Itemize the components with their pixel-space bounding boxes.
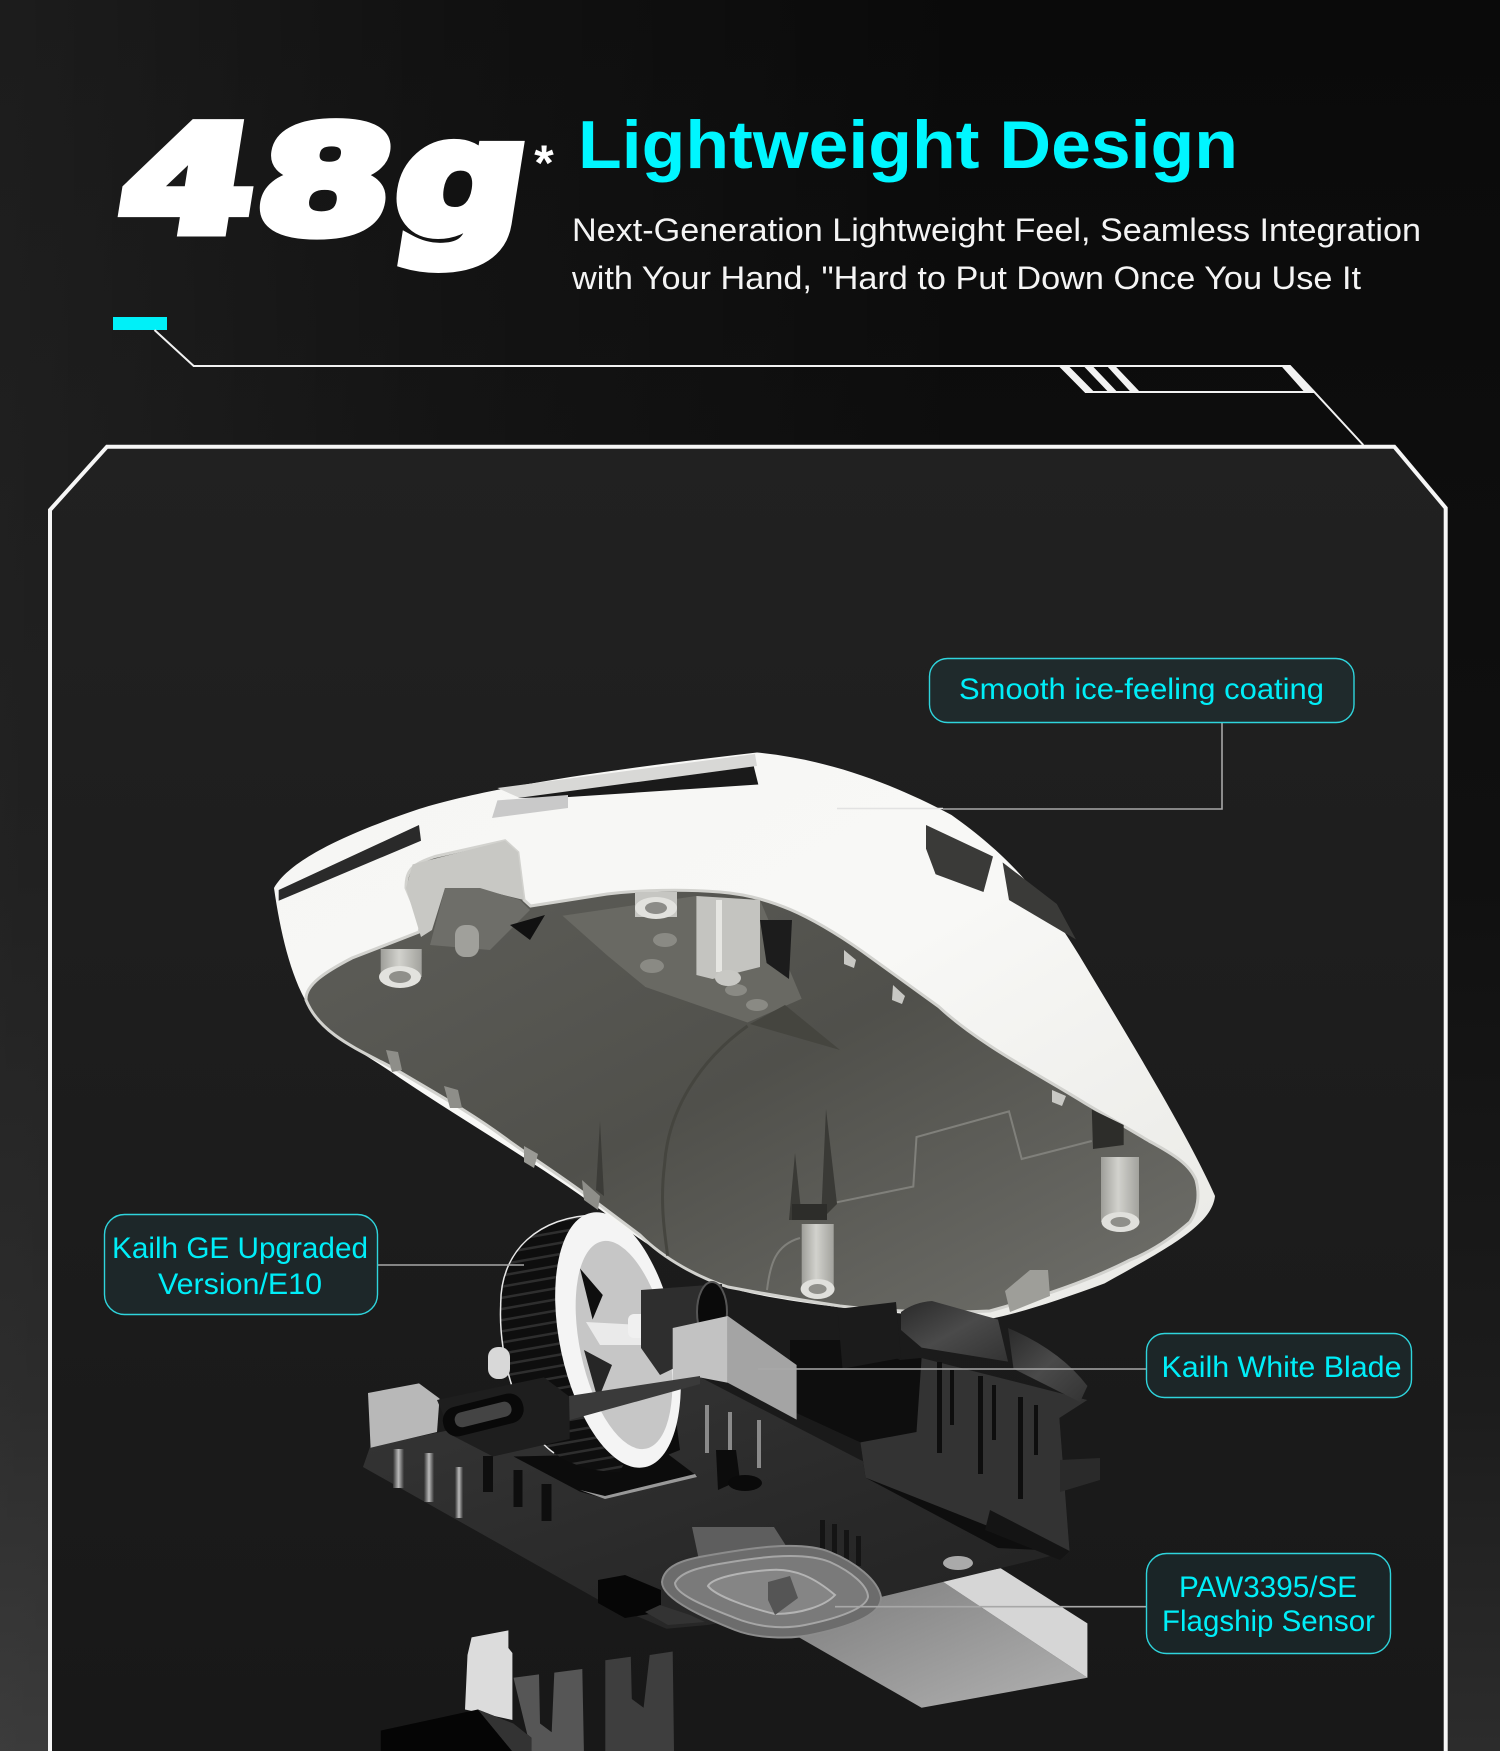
big weight figure 48g: g: [383, 88, 542, 271]
battery block: [799, 1568, 1087, 1708]
rim tabs and ribs: [386, 950, 1124, 1220]
subtitle: [571, 212, 1421, 296]
side switch module: [790, 1301, 1100, 1560]
big weight figure 48g: 4: [108, 96, 270, 266]
main panel frame: [50, 447, 1446, 1751]
callout: PAW3395/SE sensor: [1146, 1554, 1390, 1654]
inner ribs and step line: [663, 1026, 1092, 1290]
callout: Kailh GE upgraded: Version/E10: [158, 1268, 322, 1301]
callout: smooth ice-feeling coating: Smooth ice-feeling coating: [959, 673, 1324, 706]
left notch structure: [406, 841, 545, 950]
vents: [279, 754, 1076, 940]
central screw block: [562, 892, 840, 1050]
callout: PAW3395/SE sensor: PAW3395/SE: [1179, 1571, 1357, 1604]
callout: Kailh White Blade: Kailh White Blade: [1162, 1351, 1402, 1384]
interior cavity: [306, 841, 1198, 1312]
circuit board: [363, 1377, 1070, 1629]
header circuit line: [154, 330, 1363, 445]
title: Lightweight Design: [578, 107, 1238, 183]
usb port: [437, 1376, 700, 1456]
exploded mouse illustration: [274, 752, 1215, 1751]
scroll wheel face: [534, 1201, 702, 1479]
callout: Kailh White Blade: [1146, 1334, 1412, 1398]
callout: smooth ice-feeling coating: [930, 658, 1354, 722]
subtitle: with Your Hand, "Hard to Put Down Once You Use It: [571, 260, 1361, 296]
transparent switch cover right: [641, 1282, 797, 1420]
big weight figure 48g: 8: [245, 97, 407, 267]
cyan accent bar: [113, 317, 167, 330]
scroll wheel tire: [488, 1214, 623, 1471]
callout: Kailh GE upgraded: Kailh GE Upgraded: [112, 1232, 368, 1265]
shell: [274, 752, 1215, 1319]
leader lines: [378, 723, 1222, 1607]
subtitle: Next-Generation Lightweight Feel, Seamless Integration: [572, 212, 1421, 248]
asterisk: *: [534, 135, 554, 191]
big weight figure 48g: [108, 88, 542, 271]
sensor lens: [662, 1527, 881, 1637]
callout: Kailh GE upgraded: [104, 1214, 378, 1314]
screw posts: [379, 925, 1140, 1312]
lower parts: connector, shields, dock: [381, 1630, 674, 1751]
transparent block left: [368, 1383, 440, 1448]
callout: PAW3395/SE sensor: Flagship Sensor: [1162, 1605, 1375, 1638]
